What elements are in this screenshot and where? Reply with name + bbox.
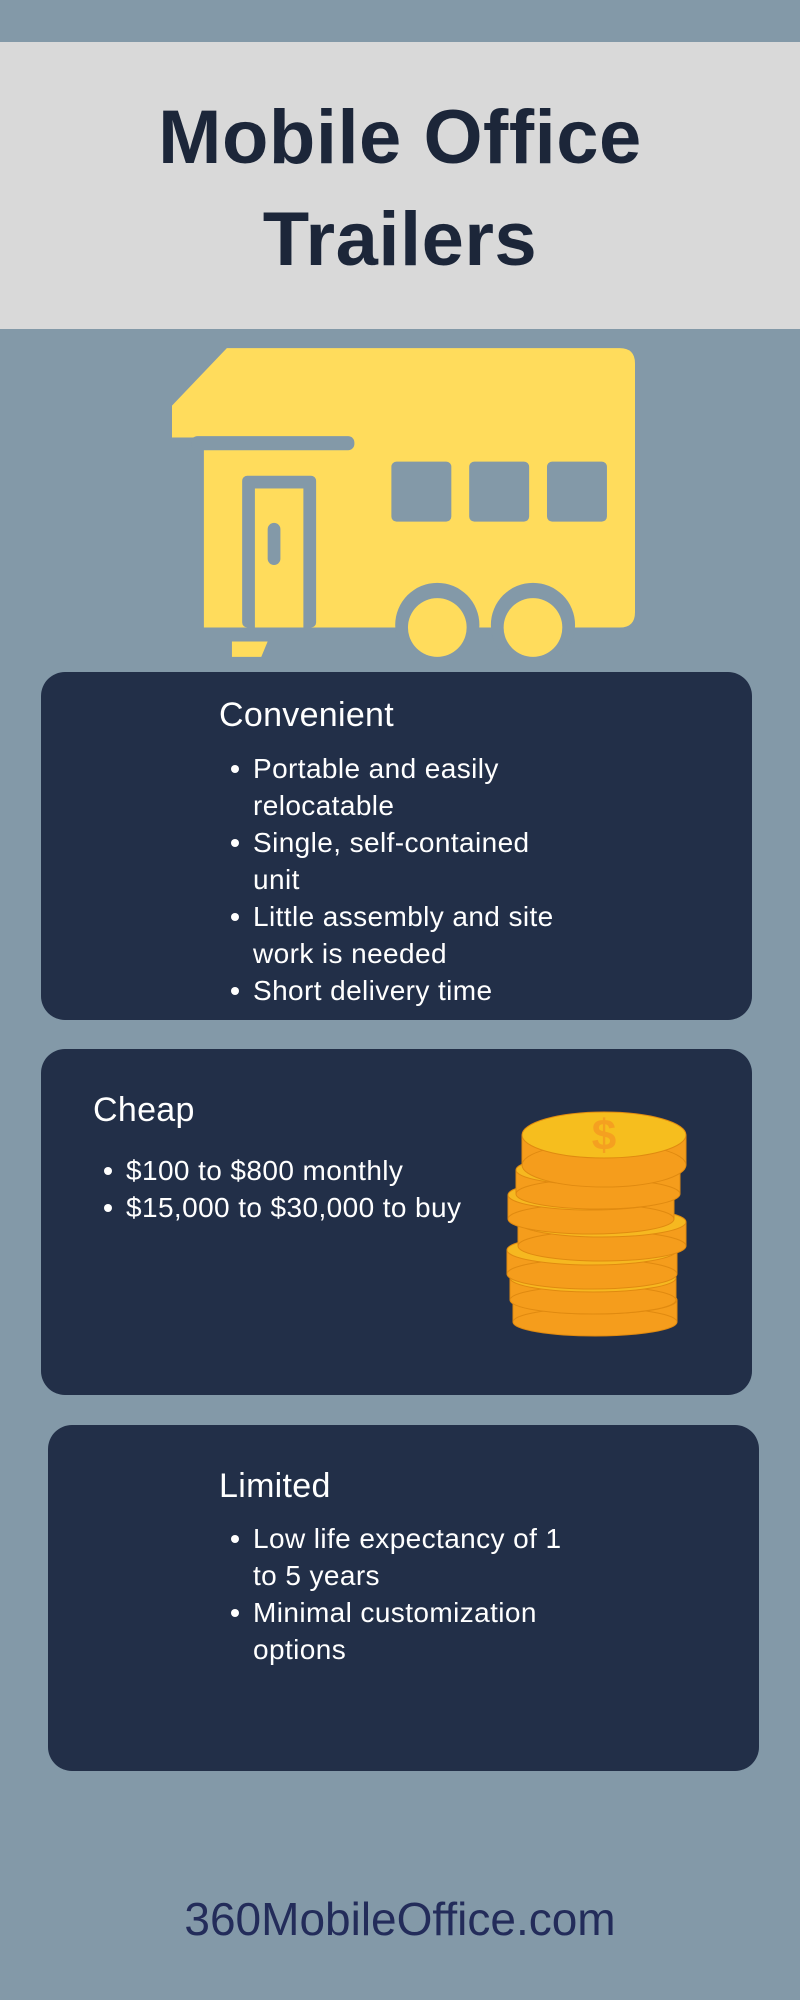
panel: limited: [48, 1425, 759, 1771]
heading: limited: Limited: [219, 1467, 331, 1505]
list: convenient: Portable and easily: [253, 753, 499, 784]
title: [158, 95, 642, 282]
list: convenient: Single, self-contained: [253, 827, 530, 858]
footer: 360MobileOffice.com: [184, 1893, 616, 1945]
list: convenient: Little assembly and site: [253, 901, 554, 932]
list: limited: options: [253, 1634, 346, 1665]
title: Mobile Office: [158, 95, 642, 180]
list: convenient: unit: [253, 864, 300, 895]
list: limited: [231, 1523, 561, 1665]
list: cheap: $100 to $800 monthly: [126, 1155, 403, 1186]
list: cheap: $15,000 to $30,000 to buy: [126, 1192, 461, 1223]
list: limited: to 5 years: [253, 1560, 380, 1591]
list: convenient: work is needed: [253, 938, 447, 969]
list: cheap: [104, 1155, 461, 1223]
list: convenient: relocatable: [253, 790, 394, 821]
title: Trailers: [263, 197, 537, 282]
panel: cheap: [41, 1049, 752, 1395]
icon: trailer: [172, 348, 635, 657]
list: limited: Minimal customization: [253, 1597, 537, 1628]
heading: convenient: Convenient: [219, 696, 394, 734]
heading: cheap: Cheap: [93, 1091, 195, 1129]
list: convenient: Short delivery time: [253, 975, 492, 1006]
header band: [0, 42, 800, 329]
icon: coin stack: $: [592, 1111, 616, 1160]
icon: coin stack: [506, 1111, 686, 1336]
list: convenient: [231, 753, 554, 1006]
list: limited: Low life expectancy of 1: [253, 1523, 561, 1554]
panel: convenient: [41, 672, 752, 1020]
